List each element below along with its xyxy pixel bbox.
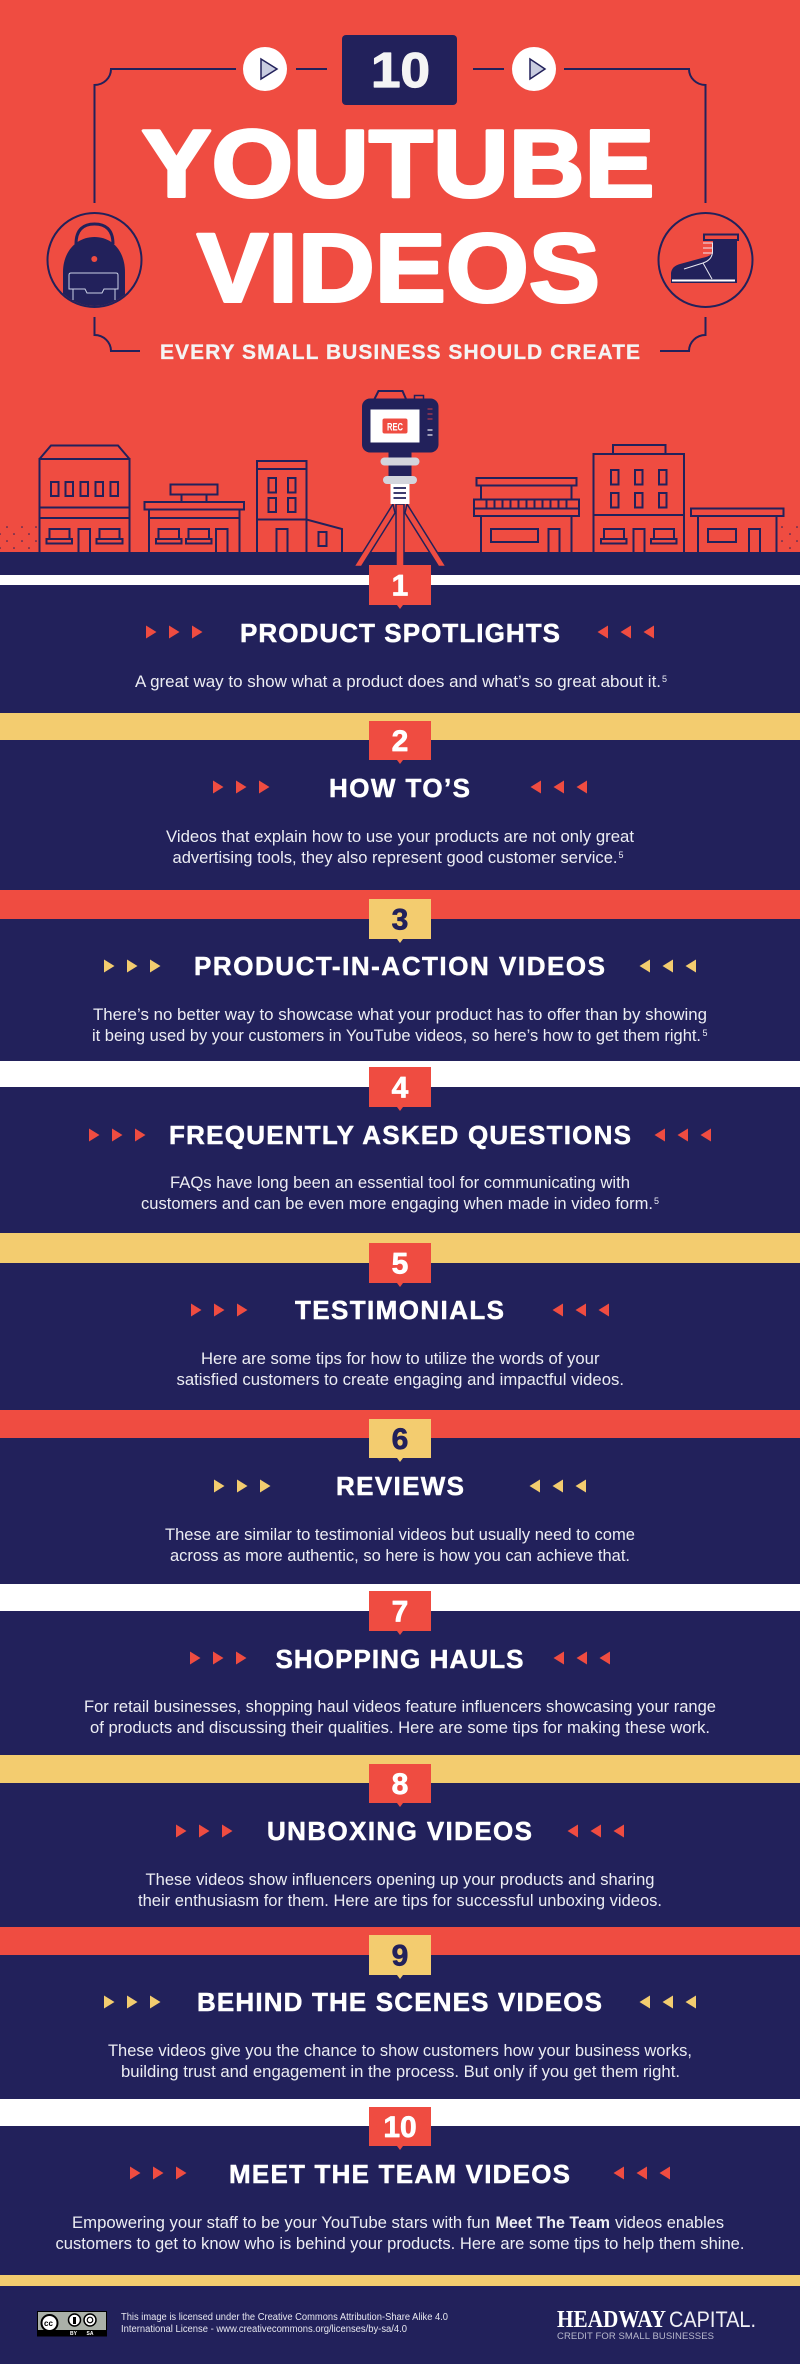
body text: customers and can be even more engaging when made in video form.	[141, 1195, 653, 1213]
divider band: yellow 2	[0, 713, 800, 740]
decorative dots	[0, 526, 798, 549]
panel: section 2 background	[0, 740, 800, 890]
arrows left	[130, 2166, 186, 2180]
number badge 1	[369, 565, 431, 609]
body text	[92, 1006, 708, 1045]
arrows right	[640, 1996, 696, 2008]
body text: customers to get to know who is behind your products. Here are some tips to help them shine.	[56, 2235, 744, 2253]
body text: Meet The Team	[496, 2214, 610, 2232]
building: flat roof shop	[691, 508, 784, 552]
number badge 6	[369, 1419, 431, 1462]
ground strip	[0, 552, 800, 575]
body text: There’s no better way to showcase what your product has to offer than by showing	[93, 1006, 707, 1024]
divider band: red 3	[0, 890, 800, 919]
panel: footer background	[0, 2286, 800, 2364]
subtitle: EVERY SMALL BUSINESS SHOULD CREATE	[160, 341, 640, 364]
heading: HOW TO’S	[329, 773, 470, 803]
arrows left	[191, 1304, 248, 1316]
heading: REVIEWS	[336, 1471, 464, 1501]
divider band: yellow 8	[0, 1755, 800, 1783]
body text: across as more authentic, so here is how you can achieve that.	[170, 1547, 630, 1565]
arrows right	[598, 626, 654, 638]
panel: section 1 background	[0, 585, 800, 713]
divider band: white 1	[0, 575, 800, 585]
title: VIDEOS: VIDEOS	[197, 214, 600, 322]
heading: SHOPPING HAULS	[276, 1644, 524, 1674]
body text: FAQs have long been an essential tool for communicating with	[170, 1174, 630, 1192]
arrows left	[213, 780, 270, 794]
body text: of products and discussing their qualities. Here are some tips for making these work.	[90, 1719, 710, 1737]
panel: header background	[0, 0, 800, 552]
arrows right	[554, 1652, 610, 1664]
building: three storey block	[594, 445, 684, 552]
icon: camera on tripod	[354, 391, 446, 566]
number badge 9	[369, 1935, 431, 1979]
section 7: shopping hauls	[84, 1591, 716, 1737]
body text: These videos show influencers opening up your products and sharing	[146, 1871, 654, 1889]
footer: licence text	[121, 2312, 448, 2335]
footer: headway capital logo: CAPITAL.	[669, 2307, 756, 2332]
number badge 2: 2	[392, 725, 408, 758]
footer: creative commons badge	[38, 2312, 106, 2337]
arrows left	[190, 1652, 246, 1664]
arrows left	[176, 1824, 232, 1838]
body text: A great way to show what a product does and what’s so great about it.	[135, 673, 661, 691]
footer: creative commons badge: cc	[44, 2319, 53, 2328]
body text	[138, 1871, 662, 1910]
footer: headway capital logo: CREDIT FOR SMALL BUSINESSES	[557, 2331, 714, 2342]
section 4: frequently asked questions	[89, 1067, 711, 1213]
number badge 8: 8	[392, 1768, 408, 1801]
body text: advertising tools, they also represent good customer service.	[172, 849, 618, 867]
footer: headway capital logo	[557, 2307, 756, 2342]
arrows right	[530, 780, 587, 794]
divider band: red 9	[0, 1927, 800, 1955]
body text	[56, 2214, 744, 2253]
body text	[176, 1350, 624, 1389]
body text: satisfied customers to create engaging and impactful videos.	[176, 1371, 624, 1389]
body text: 5	[618, 850, 624, 860]
panel: section 8 background	[0, 1783, 800, 1927]
section 8: unboxing videos	[138, 1764, 662, 1910]
section 1: product spotlights	[135, 565, 667, 691]
heading: PRODUCT SPOTLIGHTS	[240, 618, 560, 648]
panel: section 6 background	[0, 1438, 800, 1584]
section 10: meet the team videos	[56, 2107, 744, 2253]
footer: licence text: International License - www.creativecommons.org/licenses/by-sa/4.0	[121, 2324, 407, 2335]
number badge 10	[369, 2107, 431, 2150]
body text: their enthusiasm for them. Here are tips for successful unboxing videos.	[138, 1892, 662, 1910]
body text: videos enables	[615, 2214, 724, 2232]
section 6: reviews	[165, 1419, 635, 1565]
body text: 5	[702, 1028, 708, 1038]
panel: section 4 background	[0, 1087, 800, 1233]
body text: building trust and engagement in the process. But only if you get them right.	[121, 2063, 680, 2081]
arrows left	[104, 960, 160, 972]
title: YOUTUBE: YOUTUBE	[142, 110, 654, 218]
body text	[166, 828, 634, 867]
number badge 4	[369, 1067, 431, 1111]
section 2: how to's	[166, 721, 634, 867]
arrows left	[146, 626, 202, 638]
icon: play button left	[243, 47, 287, 91]
heading: MEET THE TEAM VIDEOS	[229, 2159, 570, 2189]
arrows right	[640, 960, 696, 972]
icon: boot	[658, 213, 752, 307]
panel: section 7 background	[0, 1611, 800, 1755]
body text: For retail businesses, shopping haul videos feature influencers showcasing your range	[84, 1698, 716, 1716]
section 5: testimonials	[176, 1243, 624, 1389]
icon: play button right	[512, 47, 556, 91]
number badge 3: 3	[392, 904, 408, 936]
arrows right	[614, 2166, 670, 2180]
body text	[141, 1174, 659, 1213]
heading: UNBOXING VIDEOS	[267, 1816, 532, 1846]
building: sign roof shop	[144, 484, 244, 552]
number badge 9: 9	[392, 1940, 408, 1972]
body text: Empowering your staff to be your YouTube stars with fun	[72, 2214, 490, 2232]
divider band: white 4	[0, 1061, 800, 1087]
body text: Here are some tips for how to utilize the words of your	[201, 1350, 600, 1368]
arrows right	[568, 1824, 624, 1838]
heading: FREQUENTLY ASKED QUESTIONS	[169, 1120, 631, 1150]
arrows left	[89, 1128, 146, 1142]
arrows right	[530, 1480, 586, 1492]
heading: BEHIND THE SCENES VIDEOS	[197, 1987, 602, 2017]
footer: licence text: This image is licensed under the Creative Commons Attribution-Share Alike 4.0	[121, 2312, 448, 2323]
footer: creative commons badge: BY	[70, 2331, 78, 2337]
number badge 8	[369, 1764, 431, 1807]
panel: section 9 background	[0, 1955, 800, 2099]
footer: headway capital logo: HEADWAY	[557, 2307, 666, 2333]
footer: creative commons badge: SA	[86, 2331, 94, 2337]
body text: These videos give you the chance to show customers how your business works,	[108, 2042, 692, 2060]
building: balcony shop	[474, 478, 579, 552]
building: pitched roof shop	[40, 446, 130, 552]
title number box: 10	[371, 44, 430, 98]
building: narrow tower with annex	[257, 461, 342, 552]
heading: PRODUCT-IN-ACTION VIDEOS	[194, 951, 605, 981]
arrows left	[104, 1996, 160, 2008]
body text: These are similar to testimonial videos but usually need to come	[165, 1526, 635, 1544]
divider band: yellow 5	[0, 1233, 800, 1263]
number badge 4: 4	[392, 1072, 409, 1104]
body text: 5	[654, 1196, 659, 1206]
divider band: white 10	[0, 2099, 800, 2126]
section 9: behind the scenes videos	[104, 1935, 696, 2081]
illustration: street buildings	[40, 445, 784, 552]
panel: section 3 background	[0, 919, 800, 1061]
decorative frame around title	[94, 69, 706, 351]
divider band: red 6	[0, 1410, 800, 1438]
body text: Videos that explain how to use your products are not only great	[166, 828, 634, 846]
arrows right	[552, 1304, 609, 1316]
icon: camera on tripod: REC	[387, 422, 403, 434]
number badge 1: 1	[392, 570, 408, 602]
number badge 3	[369, 899, 431, 943]
divider band: yellow footer	[0, 2275, 800, 2286]
number badge 7: 7	[392, 1596, 408, 1628]
number badge 7	[369, 1591, 431, 1635]
body text: it being used by your customers in YouTube videos, so here’s how to get them right.	[92, 1027, 701, 1045]
body text	[108, 2042, 692, 2081]
title number box	[342, 35, 457, 105]
arrows right	[654, 1128, 711, 1142]
number badge 5	[369, 1243, 431, 1287]
panel: section 10 background	[0, 2126, 800, 2275]
body text	[165, 1526, 635, 1565]
number badge 2	[369, 721, 431, 764]
icon: backpack	[48, 213, 142, 320]
body text: 5	[662, 674, 667, 684]
body text	[84, 1698, 716, 1737]
number badge 10: 10	[383, 2111, 417, 2144]
number badge 6: 6	[392, 1423, 408, 1456]
arrows left	[214, 1480, 270, 1492]
panel: section 5 background	[0, 1263, 800, 1410]
section 3: product-in-action videos	[92, 899, 708, 1045]
number badge 5: 5	[392, 1248, 408, 1280]
heading: TESTIMONIALS	[295, 1295, 504, 1325]
divider band: white 7	[0, 1584, 800, 1611]
